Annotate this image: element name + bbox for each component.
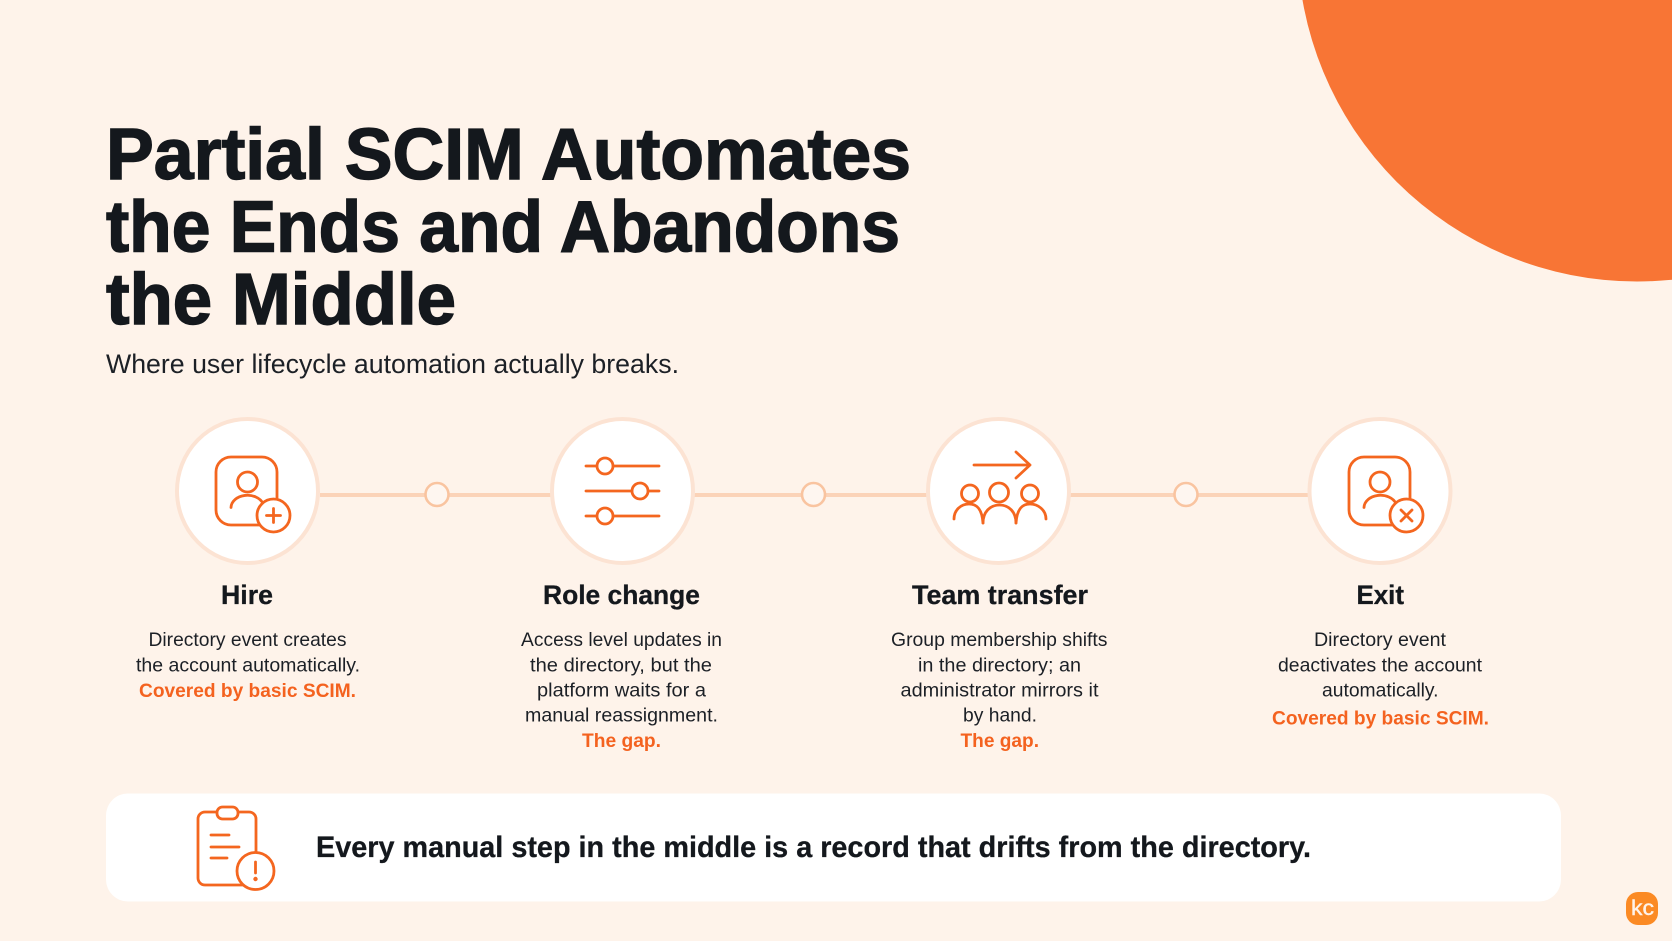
step description: Directory event — [1314, 629, 1447, 651]
step description — [891, 629, 1108, 752]
step description: The gap. — [582, 730, 661, 752]
step description — [136, 629, 360, 702]
logo: kc badge — [1626, 892, 1658, 925]
icon: clipboard alert — [198, 807, 274, 890]
title: Partial SCIM Automates — [106, 115, 911, 195]
callout banner — [106, 794, 1561, 902]
step description: Covered by basic SCIM. — [139, 680, 356, 702]
step heading: Exit — [1356, 580, 1404, 610]
step description: deactivates the account — [1278, 654, 1483, 676]
step description: automatically. — [1322, 680, 1438, 702]
step description: by hand. — [963, 704, 1037, 726]
step description: administrator mirrors it — [900, 680, 1099, 702]
step description: manual reassignment. — [525, 704, 718, 726]
subtitle: Where user lifecycle automation actually breaks. — [106, 349, 679, 379]
icon: add user — [177, 419, 318, 563]
step description: in the directory; an — [918, 654, 1081, 676]
timeline connector — [320, 483, 1308, 506]
icon: sliders — [552, 419, 693, 563]
callout text: Every manual step in the middle is a record that drifts from the directory. — [316, 831, 1311, 864]
decorative orange circle — [1298, 0, 1672, 282]
step: role change — [521, 419, 722, 752]
logo: kc badge: kc — [1631, 897, 1654, 920]
step heading: Role change — [543, 580, 700, 610]
step description — [521, 629, 722, 752]
step description: Group membership shifts — [891, 629, 1108, 651]
title: the Ends and Abandons — [106, 188, 900, 268]
step description — [1272, 629, 1489, 730]
step description: The gap. — [960, 730, 1039, 752]
title — [106, 115, 911, 340]
step heading: Hire — [221, 580, 273, 610]
step description: Directory event creates — [148, 629, 347, 651]
title: the Middle — [106, 260, 456, 340]
step: exit — [1272, 419, 1489, 730]
step description: Covered by basic SCIM. — [1272, 708, 1489, 730]
step: hire — [136, 419, 360, 702]
step description: Access level updates in — [521, 629, 722, 651]
step heading: Team transfer — [912, 580, 1088, 610]
icon: team with arrow — [928, 419, 1069, 563]
icon: remove user — [1310, 419, 1450, 563]
step description: platform waits for a — [537, 680, 706, 702]
step description: the directory, but the — [530, 654, 712, 676]
step description: the account automatically. — [136, 654, 360, 676]
step: team transfer — [891, 419, 1108, 752]
